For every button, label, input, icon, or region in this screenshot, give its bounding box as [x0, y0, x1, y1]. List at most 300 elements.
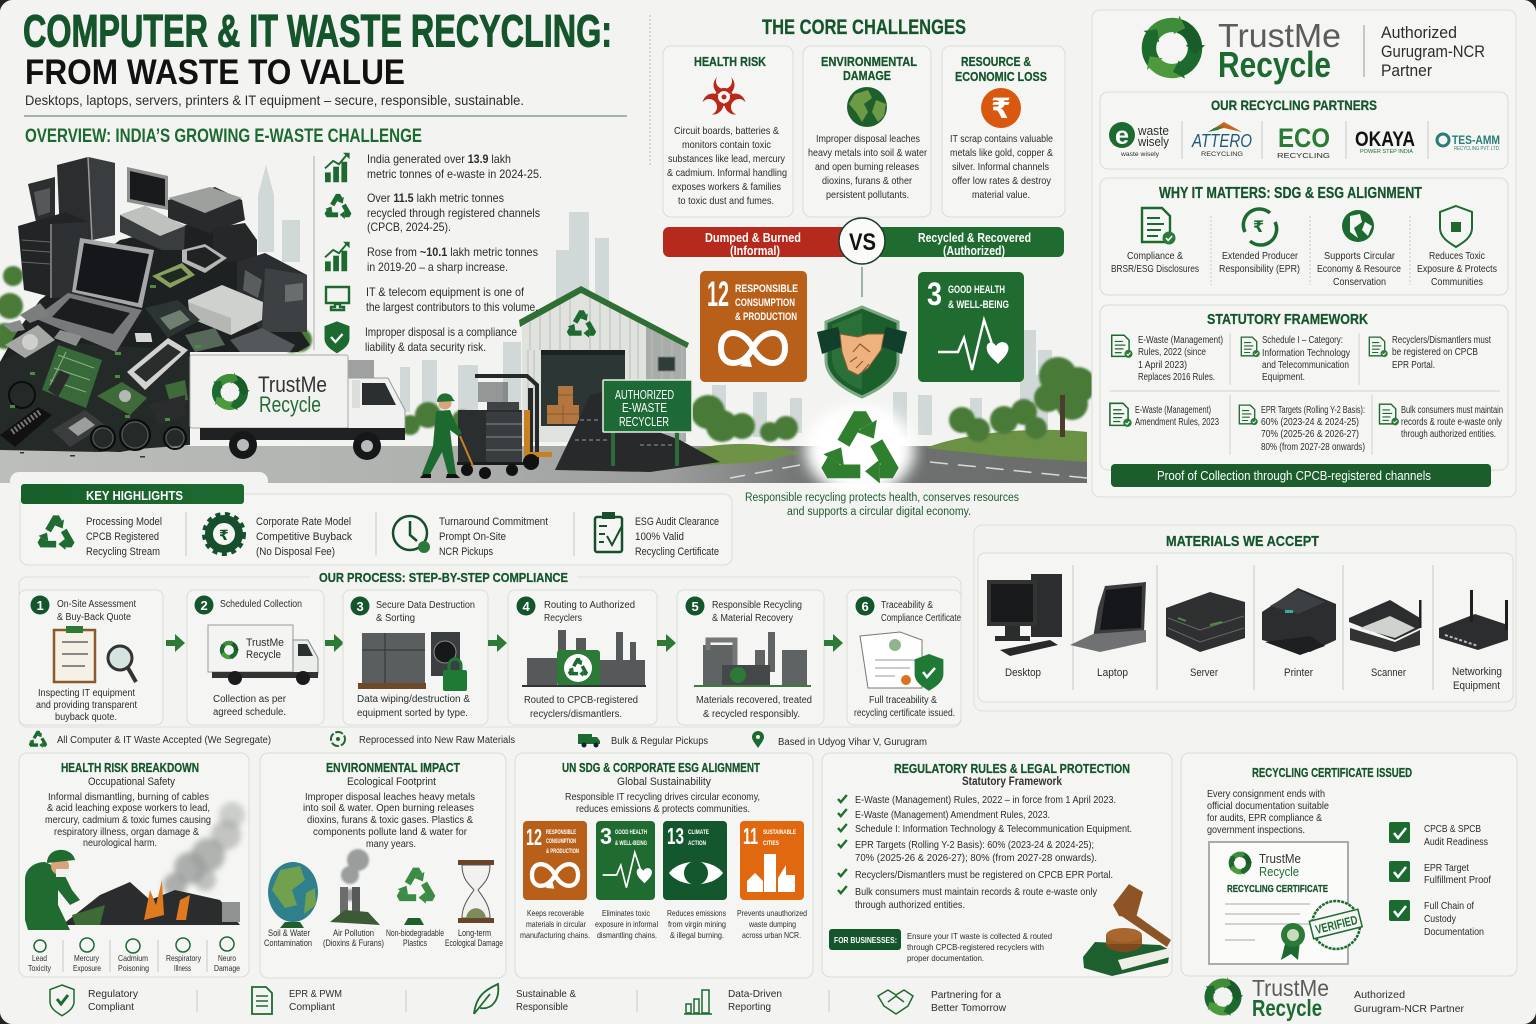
- logo: waste wisely: wisely: [1137, 135, 1170, 149]
- icon: earth: [268, 862, 318, 928]
- icon: networking equipment: [1439, 590, 1508, 650]
- rule: registration: be registered on CPCB: [1392, 347, 1478, 358]
- icon: truck: [208, 625, 318, 685]
- footer strip: [50, 975, 1464, 1021]
- SDG card 13: ACTION: [688, 840, 706, 847]
- subtitle: Desktops, laptops, servers, printers & IT equipment – secure, responsible, sustainable.: [25, 92, 524, 108]
- SDG card 3: & WELL-BEING: [615, 840, 647, 847]
- panel: resource and economic loss: material value.: [972, 189, 1030, 201]
- badge: sustainable: Responsible: [516, 1001, 568, 1013]
- icon: data destruction: [358, 632, 467, 691]
- step 5: & recycled responsibly.: [703, 709, 800, 720]
- text: circular economy: Supports Circular: [1324, 250, 1395, 262]
- sign: authorized recycler: [603, 380, 692, 466]
- highlight: turnaround: [393, 516, 548, 558]
- icon: rupee coin: [981, 88, 1021, 128]
- rule: EPR targets: EPR Targets (Rolling Y-2 Basis):: [1261, 405, 1365, 416]
- fact: 11.5 lakh: Over 11.5 lakh metric tonnes: [367, 191, 504, 205]
- certificate document: RECYCLING CERTIFICATE: [1227, 884, 1328, 895]
- step 1: & Buy-Back Quote: [57, 612, 131, 623]
- illustration: worker with cart: [420, 376, 552, 479]
- step 5: Materials recovered, treated: [696, 695, 812, 706]
- panel: key highlights: KEY HIGHLIGHTS: [86, 489, 183, 503]
- material labels: Server: [1190, 667, 1218, 679]
- label: respiratory: [166, 953, 202, 973]
- icon: neuro: [220, 937, 234, 951]
- step 2: agreed schedule.: [213, 707, 286, 718]
- rule: EPR targets: [1239, 405, 1365, 453]
- panel: environmental damage: Improper disposal leaches: [816, 133, 920, 145]
- caption: SDG 13: [667, 908, 726, 940]
- highlight: ESG audit: Recycling Certificate: [635, 546, 719, 558]
- panel: environmental damage: heavy metals into soil & water: [808, 147, 927, 159]
- logo: Attero: ATTERO: [1191, 131, 1252, 151]
- step 3: Secure Data Destruction: [376, 600, 475, 611]
- text: compliance: [1111, 250, 1199, 275]
- check: custody: Full Chain of: [1424, 900, 1474, 912]
- caption: SDG 13: Reduces emissions: [667, 908, 726, 918]
- badge: SDG 3: 3: [927, 276, 942, 312]
- badge: SDG 3: GOOD HEALTH: [948, 284, 1005, 296]
- SDG card 11: 11: [743, 823, 758, 849]
- caption: SDG 3: exposure in informal: [595, 919, 658, 929]
- badge: regulatory compliant: Regulatory: [88, 988, 139, 1000]
- icon: compliance document: [1142, 208, 1176, 244]
- fact: 13.9 lakh: metric tonnes of e-waste in 2024-25.: [367, 167, 542, 181]
- certificate document: Recycle: [1259, 864, 1299, 879]
- fact: compliance liability: liability & data security risk.: [365, 340, 486, 354]
- panel: statutory framework: [1100, 305, 1508, 470]
- panel: health risk: [663, 46, 793, 217]
- panel: health risk: substances like lead, mercury: [668, 153, 786, 165]
- text: toxic exposure: [1417, 250, 1497, 288]
- label: lead: Toxicity: [28, 963, 52, 973]
- icon: certificate and shield: [860, 632, 943, 691]
- checklist: E-Waste (Management) Rules, 2022 – in force from 1 April 2023.: [855, 794, 1116, 806]
- callout: for businesses: FOR BUSINESSES:: [834, 935, 897, 945]
- text: circular economy: Conservation: [1333, 276, 1386, 288]
- material labels: Scanner: [1371, 667, 1406, 679]
- road: [0, 446, 1087, 483]
- badge: regulatory compliant: [50, 985, 139, 1016]
- step 1: and providing transparent: [36, 700, 137, 711]
- panel: environmental impact: Ecological Footprint: [347, 776, 436, 788]
- highlight: turnaround: Turnaround Commitment: [439, 516, 548, 528]
- fact: 13.9 lakh: India generated over 13.9 lakh: [367, 152, 511, 166]
- fact: 13.9 lakh: [325, 152, 542, 182]
- step 4: Routing to Authorized: [544, 600, 635, 611]
- panel: brand and partners: [1092, 10, 1516, 497]
- logo: TrustMe Recycle: Gurugram-NCR: [1381, 42, 1485, 61]
- checklist: Schedule I: Information Technology & Telecommunication Equipment.: [855, 823, 1132, 835]
- panel: resource and economic loss: offer low rates & destroy: [952, 175, 1052, 187]
- panel: resource and economic loss: ECONOMIC LOSS: [955, 70, 1047, 84]
- badge: sustainable: Sustainable &: [516, 988, 576, 1000]
- check: audit readiness: Audit Readiness: [1424, 836, 1488, 848]
- panel: health risk: monitors contain toxic: [682, 139, 771, 151]
- sign: authorized recycler: RECYCLER: [619, 415, 669, 429]
- label: soil and water: Soil & Water: [268, 928, 310, 939]
- arrow: [824, 634, 843, 652]
- label: plastics: Plastics: [403, 938, 427, 949]
- fact: 11.5 lakh: (CPCB, 2024-25).: [367, 220, 451, 234]
- illustration: warehouse: [519, 286, 720, 472]
- label: air pollution: [323, 928, 384, 949]
- panel: health risk breakdown: HEALTH RISK BREAKDOWN: [61, 760, 199, 775]
- SDG card 12: [523, 821, 587, 900]
- fact: compliance liability: Improper disposal is a compliance: [365, 325, 517, 339]
- rule: EPR targets: 80% (from 2027-28 onwards): [1261, 442, 1365, 453]
- fact: 10.1 lakh: Rose from ~10.1 lakh metric tonnes: [367, 245, 538, 259]
- caption: responsible recycling: [745, 492, 1019, 518]
- fact: 11.5 lakh: recycled through registered channels: [367, 206, 540, 220]
- text: compliance: BRSR/ESG Disclosures: [1111, 263, 1199, 275]
- label: mercury: [73, 953, 101, 973]
- label: long-term damage: Ecological Damage: [445, 938, 503, 949]
- badge: sustainable: [474, 984, 576, 1014]
- logo: TrustMe Recycle: Recycle: [1218, 44, 1331, 85]
- panel: resource and economic loss: metals like gold, copper &: [950, 147, 1053, 159]
- label: lead: [28, 953, 52, 973]
- step 3: [343, 590, 488, 725]
- arrow: [657, 634, 676, 652]
- item: all waste accepted: All Computer & IT Waste Accepted (We Segregate): [57, 735, 271, 746]
- step 1: 1: [36, 598, 44, 613]
- highlight: ESG audit: ESG Audit Clearance: [635, 516, 719, 528]
- caption: responsible recycling: and supports a circular digital economy.: [787, 506, 971, 518]
- rule: registration: EPR Portal.: [1392, 360, 1435, 371]
- panel: key highlights: [20, 484, 732, 565]
- step 2: 2: [200, 598, 208, 613]
- heading: overview: OVERVIEW: INDIA’S GROWING E-WASTE CHALLENGE: [25, 126, 422, 147]
- caption: SDG 12: materials in circular: [526, 919, 586, 929]
- panel: health risk breakdown: Occupational Safety: [88, 776, 175, 788]
- certificate document: TrustMe: [1259, 851, 1301, 866]
- step 3: equipment sorted by type.: [357, 708, 468, 719]
- panel: recycling certificate: Every consignment ends with: [1207, 789, 1325, 800]
- fact: IT and telecom: IT & telecom equipment is one of: [366, 285, 525, 299]
- badge: data driven: [684, 988, 782, 1014]
- callout: for businesses: [829, 929, 1052, 963]
- panel: UN SDG alignment: reduces emissions & protects communities.: [576, 803, 750, 815]
- check: custody: Custody: [1424, 913, 1457, 925]
- stamp: verified: VERIFIED: [1314, 913, 1359, 937]
- caption: responsible recycling: Responsible recycling protects health, conserves resources: [745, 492, 1019, 504]
- checklist: 70% (2025-26 & 2026-27); 80% (from 2027-28 onwards).: [855, 852, 1097, 864]
- step 4: [508, 590, 657, 725]
- callout: for businesses: through CPCB-registered recyclers with: [907, 942, 1044, 952]
- panel: health risk breakdown: [19, 753, 249, 977]
- panel: UN SDG alignment: UN SDG & CORPORATE ESG ALIGNMENT: [562, 760, 760, 775]
- panel: environmental damage: and open burning releases: [815, 161, 919, 173]
- rule: amendment: E-Waste (Management): [1135, 405, 1211, 416]
- text: EPR: Responsibility (EPR): [1219, 263, 1300, 275]
- icon: hourglass: [458, 860, 494, 923]
- SDG card 11: SUSTAINABLE: [763, 829, 796, 836]
- text: toxic exposure: Communities: [1431, 276, 1483, 288]
- label: long-term damage: Long-term: [458, 928, 491, 939]
- caption: SDG 11: waste dumping: [748, 919, 796, 929]
- illustration: recycling scene: [0, 157, 1096, 495]
- icon: clipboard and magnifier: [54, 626, 136, 682]
- sign: authorized recycler: E-WASTE: [622, 401, 667, 415]
- material labels: Desktop: [1005, 667, 1041, 679]
- text: compliance: Compliance &: [1127, 250, 1183, 262]
- step 2: Scheduled Collection: [220, 599, 302, 610]
- badge: partnering: Partnering for a: [931, 989, 1001, 1001]
- panel: health risk breakdown: respiratory illness, organ damage &: [54, 826, 199, 838]
- step 4: 4: [522, 599, 530, 614]
- checklist: Bulk consumers must maintain records & route e-waste only: [855, 886, 1098, 898]
- text: toxic exposure: Reduces Toxic: [1429, 250, 1485, 262]
- panel: resource and economic loss: silver. Informal channels: [952, 161, 1049, 173]
- rule: schedule I: Information Technology: [1262, 348, 1350, 359]
- logo: Okaya: OKAYA: [1355, 128, 1415, 151]
- illustration: truck: Recycle: [259, 392, 321, 417]
- overview facts: [324, 152, 542, 354]
- icon: rupee cycle: ₹: [1253, 217, 1264, 236]
- highlight: corporate rate: ₹: [219, 528, 229, 544]
- step 2: [187, 590, 324, 725]
- logo: waste wisely: waste: [1137, 124, 1169, 138]
- arrow: [488, 634, 507, 652]
- SDG card 13: [663, 821, 727, 900]
- panel: recycling partners: [1100, 92, 1508, 169]
- panel: resource and economic loss: IT scrap contains valuable: [950, 133, 1053, 145]
- step 1: buyback quote.: [55, 712, 117, 723]
- panel: health risk: exposes workers & families: [672, 181, 781, 193]
- rule: bulk consumers: through authorized entities.: [1401, 429, 1496, 440]
- rule: 2022 rules: [1112, 335, 1223, 383]
- step 4: Routed to CPCB-registered: [524, 695, 638, 706]
- rule: 2022 rules: 1 April 2023): [1138, 360, 1187, 371]
- step 5: [677, 590, 824, 725]
- icon: rosette: [1281, 923, 1305, 960]
- panel: process: OUR PROCESS: STEP-BY-STEP COMPLIANCE: [319, 570, 568, 585]
- banner: informal vs authorized: (Authorized): [943, 244, 1005, 258]
- SDG card 11: [740, 821, 804, 900]
- banner: informal vs authorized: Recycled & Recovered: [918, 231, 1031, 245]
- panel: process: [19, 570, 961, 727]
- logo: waste wisely: [1109, 122, 1170, 158]
- step 4: Recyclers: [544, 613, 582, 624]
- text: EPR: Extended Producer: [1222, 250, 1298, 262]
- panel: statutory framework: STATUTORY FRAMEWORK: [1207, 311, 1368, 328]
- caption: SDG 3: [595, 908, 658, 940]
- icon: desktop: [987, 574, 1062, 656]
- SDG card 12: 12: [526, 824, 542, 850]
- icon: printer: [1262, 588, 1336, 655]
- label: mercury: Mercury: [74, 953, 100, 963]
- label: respiratory: Respiratory: [166, 953, 202, 963]
- badge: data driven: Data-Driven: [728, 988, 782, 1000]
- illustration: truck: [190, 355, 405, 460]
- rule: bulk consumers: Bulk consumers must maintain: [1401, 405, 1503, 416]
- panel: why it matters: WHY IT MATTERS: SDG & ESG ALIGNMENT: [1159, 185, 1422, 202]
- step 3: 3: [356, 599, 364, 614]
- label: long-term damage: [445, 928, 503, 949]
- icon: biohazard: [701, 73, 747, 115]
- rule: bulk consumers: records & route e-waste only: [1401, 417, 1502, 428]
- panel: health risk breakdown: & acid leaching expose workers to lead,: [47, 802, 210, 814]
- badge: regulatory compliant: Compliant: [88, 1001, 134, 1013]
- rule: registration: Recyclers/Dismantlers must: [1392, 335, 1491, 346]
- SDG card 11: CITIES: [763, 840, 780, 847]
- SDG card 13: CLIMATE: [688, 829, 709, 836]
- checklist: E-Waste (Management) Amendment Rules, 2023.: [855, 809, 1050, 821]
- badge: SDG 12: CONSUMPTION: [735, 297, 795, 309]
- highlight: processing model: [36, 516, 162, 558]
- panel: environmental impact: into soil & water. Open burning releases: [303, 802, 474, 814]
- illustration: burning waste: [25, 802, 245, 930]
- panel: regulatory rules: REGULATORY RULES & LEGAL PROTECTION: [894, 761, 1130, 776]
- icon: protection shield: [1440, 206, 1472, 247]
- rule: bulk consumers: [1379, 404, 1503, 440]
- title: COMPUTER & IT WASTE RECYCLING:: [23, 6, 612, 56]
- sign: authorized recycler: AUTHORIZED: [615, 388, 674, 402]
- caption: SDG 11: across urban NCR.: [742, 930, 801, 940]
- icon: globe: [847, 87, 887, 127]
- logo: footer TrustMe Recycle: TrustMe: [1252, 975, 1329, 1001]
- logo: Eco Recycling: RECYCLING: [1277, 153, 1330, 160]
- checklist: Recyclers/Dismantlers must be registered on CPCB EPR Portal.: [855, 869, 1113, 881]
- icon: truck: Recycle: [246, 649, 281, 661]
- audit checks: [1389, 822, 1491, 938]
- text: toxic exposure: Exposure & Protects: [1417, 263, 1497, 275]
- step 6: Full traceability &: [869, 695, 937, 706]
- item: all waste accepted: [28, 732, 271, 749]
- SDG card 3: [596, 821, 655, 900]
- label: soil and water: Contamination: [264, 938, 312, 949]
- label: neuro: Neuro: [218, 953, 236, 963]
- icon: gavel and book: [1083, 884, 1171, 976]
- icon: large recycling symbol: [805, 405, 915, 495]
- logo: Eco Recycling: ECO: [1278, 123, 1330, 153]
- icon: non-biodegradable plastics: [395, 869, 436, 925]
- panel: UN SDG alignment: Global Sustainability: [617, 776, 711, 788]
- panel: environmental impact: many years.: [366, 838, 416, 850]
- step 6: 6: [862, 599, 869, 614]
- fact: IT and telecom: [326, 285, 538, 314]
- panel: health risk: & cadmium. Informal handling: [667, 167, 787, 179]
- banner: informal vs authorized: [663, 218, 1064, 264]
- SDG card 12: & PRODUCTION: [546, 848, 579, 855]
- label: cadmium: Cadmium: [118, 953, 148, 963]
- info strip: [28, 731, 927, 749]
- icon: shield with handshake: [817, 307, 907, 397]
- logo: TrustMe Recycle: TrustMe: [1218, 17, 1341, 54]
- highlight: processing model: Processing Model: [86, 516, 162, 528]
- panel: recycling certificate: [1181, 753, 1517, 976]
- panel: regulatory rules: Statutory Framework: [962, 776, 1063, 788]
- checklist: through authorized entities.: [855, 899, 965, 911]
- logo: Okaya: POWER STEP INDIA: [1360, 149, 1414, 155]
- checklist: EPR Targets (Rolling Y-2 Basis): 60% (2023-24 & 2024-25);: [855, 839, 1094, 851]
- step 2: Collection as per: [213, 694, 287, 705]
- caption: SDG 3: Eliminates toxic: [602, 908, 651, 918]
- panel: environmental damage: DAMAGE: [843, 69, 891, 83]
- checklist: [838, 794, 1132, 911]
- step 5: Responsible Recycling: [712, 600, 802, 611]
- logo: footer TrustMe Recycle: [1203, 975, 1464, 1021]
- panel: recycling partners: OUR RECYCLING PARTNERS: [1211, 97, 1377, 113]
- item: raw materials: Reprocessed into New Raw Materials: [359, 735, 515, 746]
- callout: for businesses: proper documentation.: [907, 953, 984, 963]
- illustration: truck: TrustMe: [258, 372, 327, 397]
- step 5: & Material Recovery: [712, 613, 793, 624]
- step 1: Inspecting IT equipment: [38, 688, 135, 699]
- step 1: On-Site Assessment: [57, 599, 136, 610]
- highlight: ESG audit: 100% Valid: [635, 531, 684, 543]
- icon: recovery plant: [694, 632, 811, 687]
- badge: EPR and PWM: [252, 987, 342, 1014]
- badge: SDG 3: [918, 272, 1024, 382]
- label: air pollution: Air Pollution: [333, 928, 374, 939]
- panel: recycling certificate: RECYCLING CERTIFICATE ISSUED: [1252, 766, 1412, 780]
- panel: environmental damage: dioxins, furans & other: [822, 175, 912, 187]
- material labels: Equipment: [1453, 680, 1500, 692]
- logo: TrustMe Recycle: Authorized: [1381, 23, 1457, 42]
- check: custody: Documentation: [1424, 926, 1484, 938]
- icon: scanner: [1349, 600, 1422, 652]
- fact: IT and telecom: the largest contributors to this volume.: [366, 300, 538, 314]
- material labels: [1005, 666, 1502, 692]
- panel: regulatory rules: [822, 753, 1172, 977]
- badge: SDG 12: [700, 271, 807, 382]
- SDG card 12: RESPONSIBLE: [546, 829, 576, 836]
- bar: proof of collection: Proof of Collection through CPCB-registered channels: [1157, 469, 1431, 483]
- text: circular economy: Economy & Resource: [1317, 263, 1401, 275]
- panel: UN SDG alignment: Responsible IT recycling drives circular economy,: [565, 791, 760, 803]
- arrow: [166, 634, 185, 652]
- rule: EPR targets: 70% (2025-26 & 2026-27): [1261, 429, 1359, 440]
- rule: schedule I: and Telecommunication: [1262, 360, 1349, 371]
- icon: globe: [1342, 210, 1374, 242]
- icon: rupee coin: ₹: [991, 92, 1011, 125]
- panel: environmental damage: ENVIRONMENTAL: [821, 55, 917, 69]
- rule: EPR targets: 60% (2023-24 & 2024-25): [1261, 417, 1359, 428]
- SDG card 3: GOOD HEALTH: [615, 829, 647, 836]
- material labels: Networking: [1452, 666, 1502, 678]
- banner: informal vs authorized: Dumped & Burned: [705, 231, 801, 245]
- badge: partnering: [878, 989, 1006, 1014]
- panel: recycling certificate: government inspections.: [1207, 825, 1305, 836]
- panel: health risk: Circuit boards, batteries &: [674, 125, 779, 137]
- text: EPR: [1219, 250, 1300, 275]
- banner: informal vs authorized: VS: [849, 229, 876, 256]
- rule: amendment: Amendment Rules, 2023: [1135, 417, 1219, 428]
- panel: environmental damage: [803, 46, 931, 217]
- panel: materials we accept: MATERIALS WE ACCEPT: [1166, 533, 1319, 550]
- arrow: [325, 634, 344, 652]
- panel: recycling certificate: for audits, EPR compliance &: [1207, 813, 1322, 824]
- SDG card 12: CONSUMPTION: [546, 838, 576, 845]
- check: custody: [1389, 900, 1484, 938]
- caption: SDG 12: [520, 908, 590, 940]
- step 6: [847, 590, 961, 725]
- SDG card 3: 3: [600, 823, 612, 849]
- logo: footer TrustMe Recycle: Recycle: [1252, 995, 1322, 1021]
- panel: recycling certificate: official documentation suitable: [1207, 801, 1329, 812]
- step 3: & Sorting: [376, 613, 415, 624]
- badge: SDG 12: 12: [707, 275, 729, 314]
- rule: 2022 rules: E-Waste (Management): [1138, 335, 1223, 346]
- panel: health risk breakdown: mercury, cadmium & toxic fumes causing: [45, 814, 211, 826]
- certificate document: [1209, 842, 1366, 964]
- bar: proof of collection: [1111, 464, 1491, 487]
- badge: SDG 12: & PRODUCTION: [735, 311, 797, 323]
- step 6: recycling certificate issued.: [854, 708, 955, 719]
